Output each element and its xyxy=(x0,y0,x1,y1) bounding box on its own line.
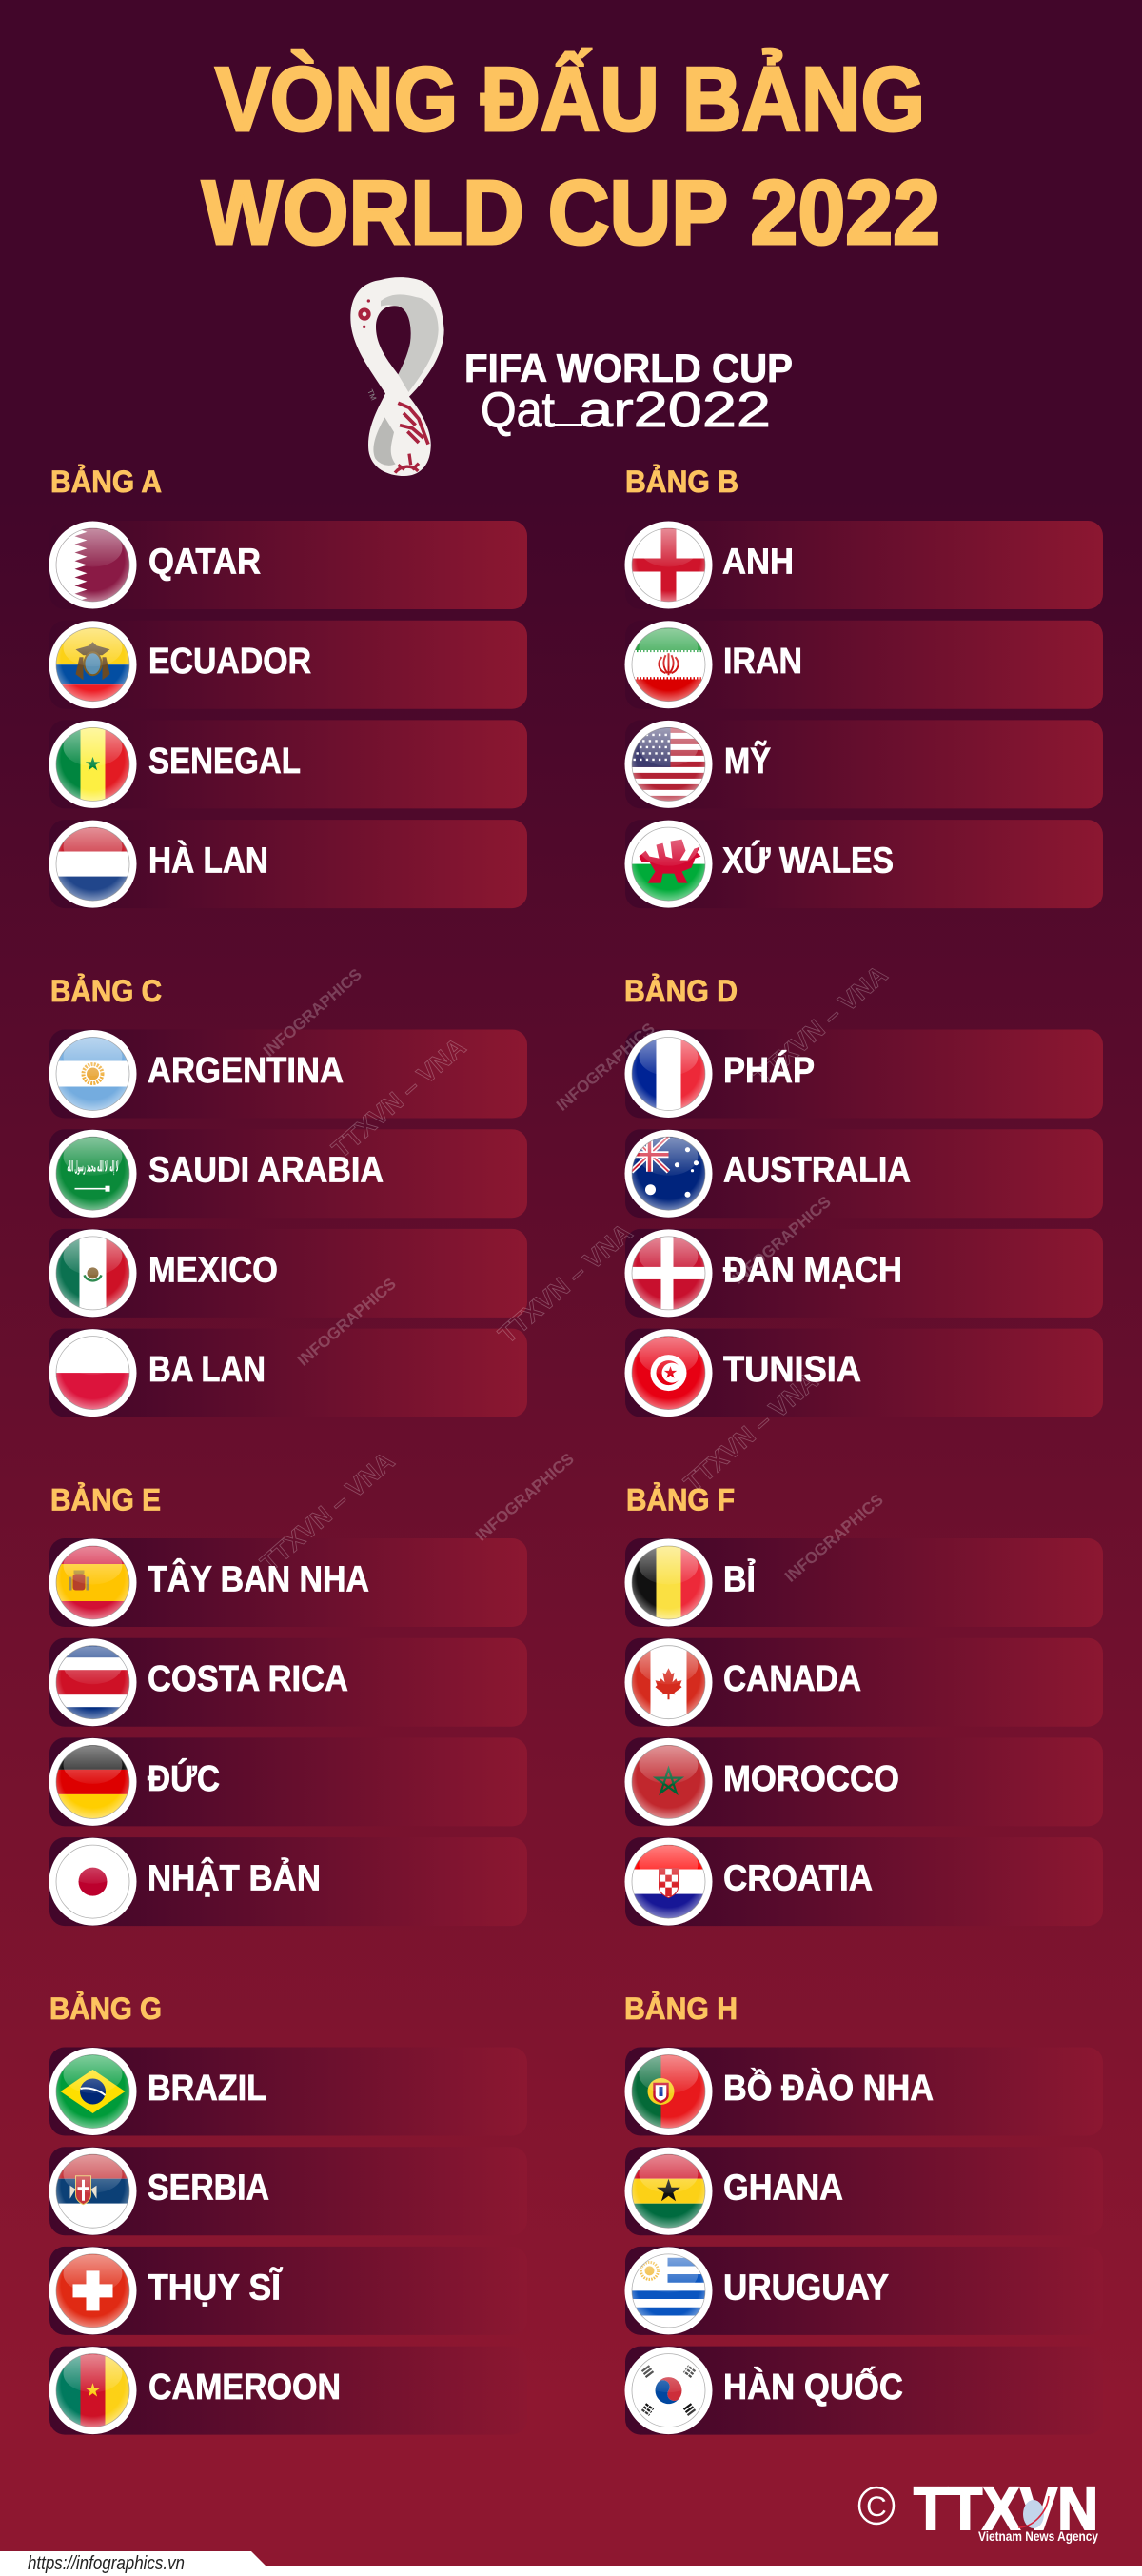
watermarks: TTXVN – VNA xyxy=(679,1366,823,1497)
icon: Poland flag xyxy=(49,1329,137,1417)
label: COSTA RICA xyxy=(148,1659,348,1699)
icon: Netherlands flag xyxy=(49,821,137,908)
icon: Iran flag xyxy=(624,621,712,708)
icon: Portugal flag xyxy=(624,2048,712,2135)
label: ANH xyxy=(722,543,794,583)
label: MOROCCO xyxy=(723,1759,899,1799)
heading: Bảng C: BẢNG C xyxy=(50,974,162,1008)
logo text: Qatar 2022: Qat xyxy=(481,383,556,438)
icon: Qatar flag xyxy=(49,522,137,609)
label: QATAR xyxy=(148,543,261,583)
watermarks: INFOGRAPHICS xyxy=(294,1275,400,1370)
label: ARGENTINA xyxy=(148,1051,344,1091)
row: Morocco xyxy=(624,1737,1103,1826)
label: BỈ xyxy=(723,1557,756,1599)
label: HÀN QUỐC xyxy=(723,2365,903,2408)
panel: group C xyxy=(49,974,527,1417)
label: ĐAN MẠCH xyxy=(723,1250,902,1290)
heading: Bảng H: BẢNG H xyxy=(624,1991,738,2026)
icon: South Korea flag xyxy=(624,2347,712,2434)
row: Argentina xyxy=(49,1030,527,1118)
icon: Japan flag xyxy=(49,1838,137,1926)
row: Mexico xyxy=(49,1229,527,1318)
icon: figure-eight emblem xyxy=(350,277,444,476)
label: SERBIA xyxy=(148,2169,269,2209)
panel: group E xyxy=(49,1483,527,1926)
icon: France flag xyxy=(624,1030,712,1118)
row: Croatia xyxy=(624,1837,1103,1926)
heading: Bảng E: BẢNG E xyxy=(50,1483,161,1517)
icon: Argentina flag xyxy=(49,1030,137,1118)
row: Saudi Arabia: لا إله إلا الله محمد رسول الله xyxy=(67,1159,118,1176)
row: Tunisia xyxy=(624,1329,1103,1417)
label: GHANA xyxy=(723,2169,843,2209)
label: MEXICO xyxy=(148,1250,278,1290)
label: TUNISIA xyxy=(723,1350,861,1390)
label: SENEGAL xyxy=(148,742,301,782)
panel: group B xyxy=(624,465,1103,908)
logo: TTXVN copyright xyxy=(859,2474,1098,2544)
row: Cameroon xyxy=(49,2347,527,2435)
heading: Bảng G: BẢNG G xyxy=(49,1991,162,2026)
label: TÂY BAN NHA xyxy=(148,1557,369,1599)
title xyxy=(202,48,940,264)
label: PHÁP xyxy=(723,1049,815,1091)
label: ĐỨC xyxy=(148,1757,220,1799)
row: Uruguay xyxy=(624,2247,1103,2335)
watermarks xyxy=(255,960,893,1586)
icon: Brazil flag xyxy=(49,2048,137,2135)
row: Thụy Sĩ xyxy=(49,2247,527,2335)
icon: USA flag xyxy=(624,721,712,808)
label: THỤY SĨ xyxy=(148,2266,283,2308)
row: Ba Lan xyxy=(49,1329,527,1417)
row: Costa Rica xyxy=(49,1638,527,1727)
watermarks: INFOGRAPHICS xyxy=(260,965,365,1060)
row: Serbia xyxy=(49,2147,527,2235)
row: Pháp xyxy=(624,1030,1103,1118)
logo: FIFA World Cup Qatar 2022 xyxy=(350,277,793,476)
heading: Bảng A: BẢNG A xyxy=(50,465,162,499)
icon: Ecuador flag xyxy=(49,621,137,708)
icon: Serbia flag xyxy=(49,2148,137,2235)
icon: Spain flag xyxy=(49,1538,137,1626)
label: SAUDI ARABIA xyxy=(148,1151,384,1191)
watermarks: TTXVN – VNA xyxy=(748,960,893,1091)
panel: group D xyxy=(624,974,1103,1417)
title: VÒNG ĐẤU BẢNG xyxy=(215,48,925,150)
row: Hà Lan xyxy=(49,820,527,908)
icon: Costa Rica flag xyxy=(49,1638,137,1726)
icon: Morocco flag xyxy=(624,1738,712,1826)
label: MỸ xyxy=(724,740,771,782)
label: XỨ WALES xyxy=(722,840,894,882)
label: ECUADOR xyxy=(148,642,311,682)
logo text: Qatar 2022: ar2022 xyxy=(579,383,771,438)
label: CROATIA xyxy=(723,1859,873,1899)
icon: Croatia flag xyxy=(624,1838,712,1926)
heading: Bảng D: BẢNG D xyxy=(624,974,738,1008)
label: HÀ LAN xyxy=(148,840,268,882)
row: Saudi Arabia xyxy=(49,1129,527,1218)
label: CANADA xyxy=(723,1659,861,1699)
icon: Ghana flag xyxy=(624,2148,712,2235)
row: Mỹ xyxy=(624,720,1103,808)
watermarks: TTXVN – VNA xyxy=(326,1032,471,1163)
panel: group A xyxy=(49,465,527,908)
row: Hàn Quốc xyxy=(624,2347,1103,2435)
row: Nhật Bản xyxy=(49,1837,527,1926)
label: BỒ ĐÀO NHA xyxy=(723,2067,934,2109)
watermarks: INFOGRAPHICS xyxy=(553,1020,659,1115)
watermarks: TTXVN – VNA xyxy=(493,1218,638,1349)
icon: copyright mark: C xyxy=(866,2491,887,2523)
panel: group H xyxy=(624,1991,1103,2435)
row: Bồ Đào Nha xyxy=(624,2047,1103,2136)
label: BA LAN xyxy=(148,1350,266,1390)
label: IRAN xyxy=(723,642,802,682)
icon: Canada flag xyxy=(624,1638,712,1726)
agency name: Vietnam News Agency xyxy=(978,2528,1098,2544)
row: Iran xyxy=(624,621,1103,709)
icon: Mexico flag xyxy=(49,1229,137,1317)
row: Đan Mạch xyxy=(624,1229,1103,1318)
icon: figure-eight emblem: TM xyxy=(365,388,378,402)
label: CAMEROON xyxy=(148,2368,341,2408)
watermarks: INFOGRAPHICS xyxy=(781,1491,887,1586)
row: Qatar xyxy=(49,521,527,609)
wordmark: TTXVN: TTXVN xyxy=(914,2474,1098,2543)
icon: England flag xyxy=(624,522,712,609)
row: Đức xyxy=(49,1737,527,1826)
icon: Cameroon flag xyxy=(49,2347,137,2434)
icon: Australia flag xyxy=(624,1130,712,1218)
icon: Belgium flag xyxy=(624,1538,712,1626)
icon: copyright mark xyxy=(859,2487,894,2524)
row: Tây Ban Nha xyxy=(49,1538,527,1627)
logo text: FIFA World Cup: FIFA WORLD CUP xyxy=(464,346,793,390)
row: Senegal xyxy=(49,720,527,808)
heading: Bảng B: BẢNG B xyxy=(625,465,738,499)
label: BRAZIL xyxy=(148,2069,266,2109)
label: AUSTRALIA xyxy=(723,1151,911,1191)
icon: Tunisia flag xyxy=(624,1329,712,1417)
icon: Senegal flag xyxy=(49,721,137,808)
row: Ghana xyxy=(624,2147,1103,2235)
panel: group F xyxy=(624,1483,1103,1926)
icon: Denmark flag xyxy=(624,1229,712,1317)
URL text: https://infographics.vn xyxy=(28,2553,185,2574)
row: Anh xyxy=(624,521,1103,609)
watermarks: INFOGRAPHICS xyxy=(729,1193,835,1288)
heading: Bảng F: BẢNG F xyxy=(626,1483,735,1517)
label: URUGUAY xyxy=(723,2268,889,2308)
icon: Wales flag xyxy=(624,821,712,908)
row: Australia xyxy=(624,1129,1103,1218)
title: WORLD CUP 2022 xyxy=(202,162,940,264)
row: Brazil xyxy=(49,2047,527,2136)
label: NHẬT BẢN xyxy=(148,1857,321,1899)
watermarks: TTXVN – VNA xyxy=(255,1446,400,1577)
row: Canada xyxy=(624,1638,1103,1727)
watermarks: INFOGRAPHICS xyxy=(472,1450,578,1545)
icon: Uruguay flag xyxy=(624,2247,712,2334)
icon: Germany flag xyxy=(49,1738,137,1826)
footer strip with URL xyxy=(0,2551,1142,2576)
icon: Saudi Arabia flag xyxy=(49,1130,137,1218)
row: Ecuador xyxy=(49,621,527,709)
row: Bỉ xyxy=(624,1538,1103,1627)
panel: group G xyxy=(49,1991,527,2435)
logo text: Qatar 2022 xyxy=(481,383,771,438)
icon: globe xyxy=(1018,2496,1049,2528)
icon: Switzerland flag xyxy=(49,2247,137,2334)
row: Xứ Wales xyxy=(624,820,1103,908)
